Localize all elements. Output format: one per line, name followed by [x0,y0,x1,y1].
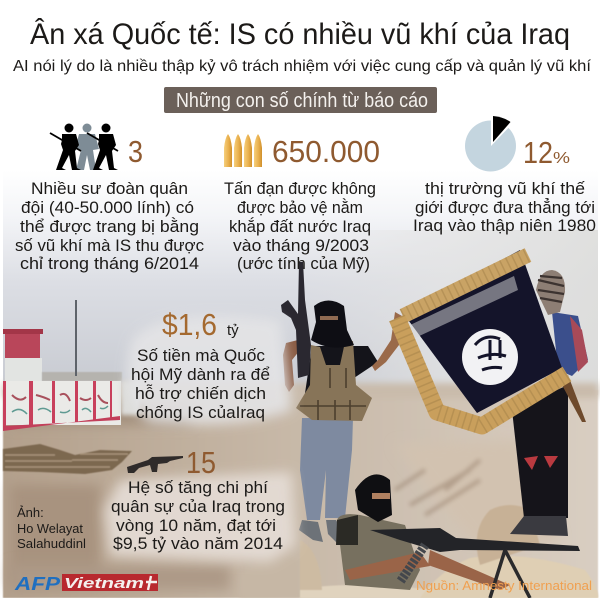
number 12%: % [553,150,570,167]
description: quân sự của Iraq trong [111,497,285,516]
panel: 3 divisions [15,124,204,273]
Vietnam plus logo: Vietnam [64,575,144,592]
background photo scene [3,170,598,598]
banner heading: Những con số chính từ báo cáo [176,90,428,112]
unit ty: tỷ [227,322,239,339]
gunner sandbags [300,505,598,598]
sandbag wall [3,444,132,474]
icon: pie chart [465,116,516,172]
description: giới được đưa thẳng tới [415,198,595,217]
photo credit: Ho Welayat [17,521,83,536]
Vietnam plus logo [62,574,158,592]
icon: three soldiers [50,124,118,170]
description: Nhiều sư đoàn quân [31,179,188,198]
standing fighter with rifle [281,262,402,544]
photo credit: Salahuddinl [17,536,86,551]
second fighter holding flag [510,270,588,536]
description: Iraq vào thập niên 1980 [413,216,596,235]
description [111,478,285,553]
description: $9,5 tỷ vào năm 2014 [113,534,283,553]
number 12%: 12 [523,135,553,170]
icon: bullets [224,134,262,167]
seated gunner [336,474,580,598]
description [413,179,596,235]
description: được bảo vệ nằm [237,198,363,217]
description: vòng 10 năm, đạt tới [116,516,276,535]
number 15: 15 [186,445,216,480]
description: Tấn đạn được không [224,179,376,198]
description: vào tháng 9/2003 [233,236,369,255]
translucent text halo lower [104,472,296,562]
panel: 1.6 billion dollars [131,307,270,422]
panel: factor 15 [111,445,285,553]
title: Ân xá Quốc tế: IS có nhiều vũ khí của Iraq [30,18,570,51]
description: Hệ số tăng chi phí [128,478,268,497]
description: thể được trang bị bằng [20,217,199,236]
subtitle: AI nói lý do là nhiều thập kỷ vô trách nhiệm với việc cung cấp và quản lý vũ khí [13,58,592,75]
number $1,6: $1,6 [162,307,217,342]
number 3: 3 [128,134,143,169]
photo credit [17,505,86,551]
number 650.000: 650.000 [272,134,380,169]
description [15,179,204,273]
description: chỉ trong tháng 6/2014 [20,254,199,273]
guard tower and painted wall [3,300,141,431]
description: khắp đất nước Iraq [229,217,371,236]
panel: 12% of arms market [413,116,596,235]
description: hội Mỹ dành ra để [131,365,270,384]
description: hỗ trợ chiến dịch [135,384,266,403]
panel: 650.000 rounds [224,134,380,273]
source: Nguồn: Amnesty International [416,578,592,593]
photo credit: Ảnh: [17,505,44,520]
description [224,179,376,273]
description: đội (40-50.000 lính) có [21,198,194,217]
description [131,346,270,422]
description: chống IS củaIraq [136,403,265,422]
description: (ước tính của Mỹ) [237,254,370,273]
description: thị trường vũ khí thế [425,179,586,198]
description: số vũ khí mà IS thu được [15,236,204,255]
AFP logo: AFP [14,574,61,594]
translucent text halo upper [126,316,292,424]
black flag with gold fringe [397,250,567,426]
icon: assault rifle [127,456,183,473]
description: Số tiền mà Quốc [137,346,266,365]
